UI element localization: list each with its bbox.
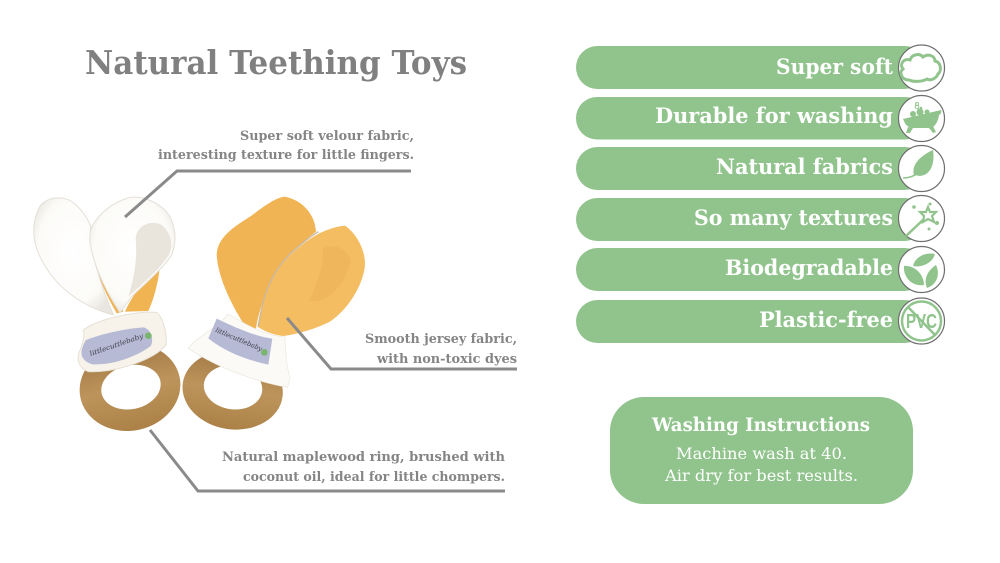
title: Natural Teething Toys [85,43,467,82]
toy: orange jersey ears [217,197,365,336]
toy: wooden ring right [177,344,288,436]
toy: white cuff and label right [188,314,290,387]
feature: so many textures: So many textures [694,205,893,230]
feature: durable for washing [576,96,944,142]
feature: so many textures [576,196,944,242]
icon: leaf [903,150,933,178]
callout: velour fabric [125,129,414,217]
icon: no PVC: PVC [906,311,937,333]
panel: washing instructions: Machine wash at 40. [676,444,847,463]
icon: magic wand [906,202,939,236]
callout: jersey fabric: with non-toxic dyes [376,352,517,367]
feature: plastic-free [576,298,944,344]
callout: velour fabric: interesting texture for little fingers. [158,148,414,163]
feature: natural fabrics [576,146,944,192]
feature: natural fabrics: Natural fabrics [716,154,893,179]
toy: white cuff and label left [78,312,166,372]
panel: washing instructions [610,397,913,504]
toy: white velour ears [34,197,175,315]
feature: biodegradable [576,246,944,292]
feature: biodegradable: Biodegradable [725,255,893,280]
feature: durable for washing: Durable for washing [655,103,893,128]
feature: plastic-free: Plastic-free [759,307,893,332]
product photo: two bunny-ear teething toys [34,197,365,440]
callout: velour fabric: Super soft velour fabric, [240,129,414,144]
callout: maplewood ring: coconut oil, ideal for little chompers. [243,470,505,485]
icon: recycling leaves [904,254,938,288]
callout: maplewood ring: Natural maplewood ring, brushed with [222,450,506,465]
icon: bathtub [903,102,941,133]
panel: washing instructions: Air dry for best results. [664,466,858,485]
toy: white cuff and label right: littlecuttlebaby [214,326,264,353]
callout: maplewood ring [150,430,506,491]
feature: super soft [576,45,944,91]
feature: super soft: Super soft [776,54,893,79]
icon: no PVC [902,302,941,340]
callout: jersey fabric [287,318,517,369]
callout: jersey fabric: Smooth jersey fabric, [365,332,517,347]
toy: white cuff and label left: littlecuttlebaby [89,332,145,358]
panel: washing instructions: Washing Instructions [651,414,870,436]
icon: cloud [901,55,940,81]
toy: wooden ring left [71,334,189,440]
